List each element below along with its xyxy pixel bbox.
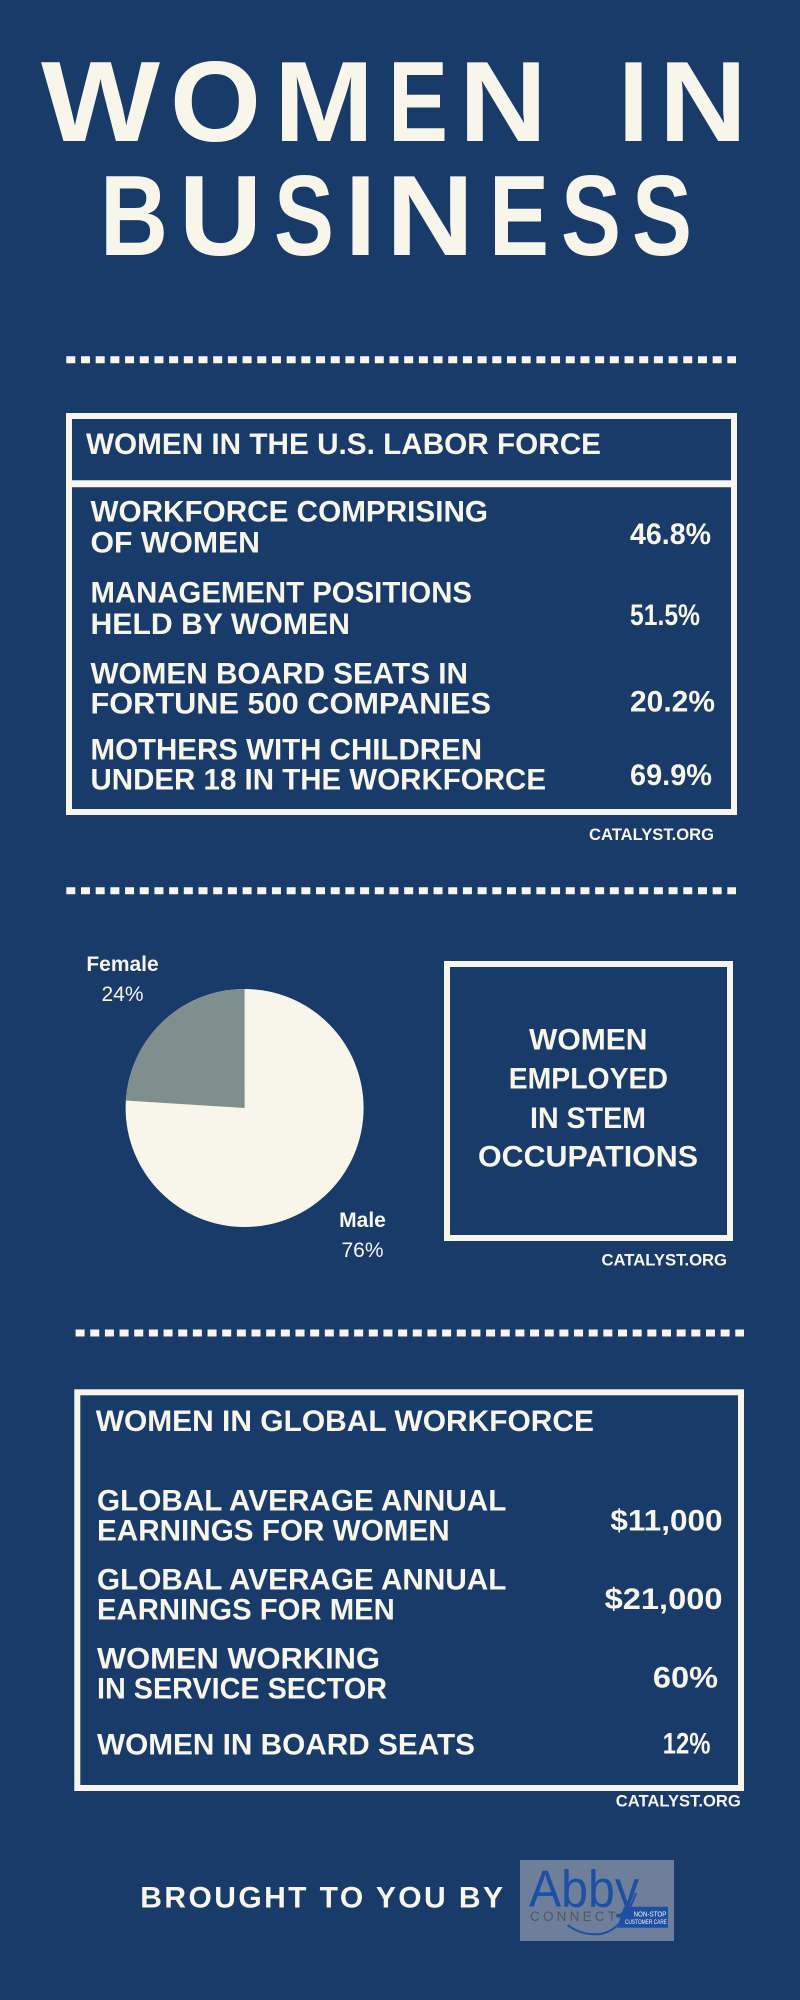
row: management positions bbox=[90, 577, 700, 641]
logo sub-wordmark: CONNECT bbox=[530, 1909, 616, 1924]
title bbox=[41, 39, 747, 280]
title: W bbox=[41, 39, 160, 166]
label: male 76%: 76% bbox=[341, 1239, 384, 1262]
logo tag bbox=[617, 1907, 668, 1928]
row: mothers in the workforce: MOTHERS WITH CHILDREN bbox=[90, 733, 482, 766]
row: workforce comprising of women: WORKFORCE COMPRISING bbox=[90, 496, 488, 529]
footer credit: BROUGHT TO YOU BY bbox=[140, 1882, 503, 1915]
title: N bbox=[386, 153, 474, 280]
logo wordmark: Abby bbox=[529, 1861, 639, 1919]
row: earnings for women bbox=[97, 1484, 722, 1547]
label: male 76% bbox=[339, 1209, 386, 1262]
title: I bbox=[618, 39, 649, 166]
heading: global workforce: WOMEN IN GLOBAL WORKFORCE bbox=[96, 1405, 594, 1438]
row: mothers in the workforce: UNDER 18 IN THE WORKFORCE bbox=[90, 763, 546, 796]
title: M bbox=[274, 39, 374, 166]
panel: women in the U.S. labor force bbox=[69, 416, 734, 812]
slice: male bbox=[126, 989, 364, 1227]
row: board seats: WOMEN IN BOARD SEATS bbox=[97, 1728, 475, 1761]
row: earnings for men: GLOBAL AVERAGE ANNUAL bbox=[97, 1563, 506, 1596]
source: labor force: CATALYST.ORG bbox=[589, 825, 714, 844]
title: E bbox=[489, 153, 549, 280]
logo tag: CUSTOMER CARE bbox=[625, 1919, 667, 1926]
row: service sector: WOMEN WORKING bbox=[97, 1642, 380, 1675]
slice: female bbox=[126, 989, 245, 1108]
panel frame bbox=[447, 964, 730, 1238]
title: E bbox=[388, 39, 448, 166]
row: earnings for men: $21,000 bbox=[605, 1583, 722, 1616]
row: earnings for men bbox=[97, 1563, 722, 1626]
panel text: EMPLOYED bbox=[509, 1063, 668, 1096]
label: female 24%: Female bbox=[86, 953, 159, 976]
row: workforce comprising of women bbox=[90, 496, 711, 560]
row: management positions: MANAGEMENT POSITIONS bbox=[90, 577, 472, 610]
title: S bbox=[274, 153, 334, 280]
panel text: OCCUPATIONS bbox=[478, 1141, 698, 1174]
label: male 76%: Male bbox=[339, 1209, 386, 1232]
heading: labor force: WOMEN IN THE U.S. LABOR FORCE bbox=[86, 428, 601, 461]
panel frame bbox=[69, 416, 734, 812]
label: female 24% bbox=[86, 953, 159, 1006]
title: B bbox=[100, 153, 168, 280]
row: management positions: 51.5% bbox=[630, 599, 700, 632]
title: I bbox=[345, 153, 376, 280]
row: management positions: HELD BY WOMEN bbox=[90, 608, 350, 641]
row: board seats bbox=[90, 657, 715, 720]
panel text: IN STEM bbox=[530, 1102, 646, 1135]
source: global workforce: CATALYST.ORG bbox=[616, 1792, 741, 1811]
title: U bbox=[179, 153, 262, 280]
title: S bbox=[632, 153, 692, 280]
row: workforce comprising of women: OF WOMEN bbox=[90, 527, 260, 560]
panel: women employed in STEM bbox=[447, 964, 730, 1238]
panel text: WOMEN bbox=[529, 1023, 648, 1056]
panel frame bbox=[77, 1392, 741, 1788]
row: board seats: WOMEN BOARD SEATS IN bbox=[90, 657, 468, 690]
logo swoosh bbox=[568, 1893, 636, 1934]
row: board seats: 20.2% bbox=[630, 686, 715, 719]
row: workforce comprising of women: 46.8% bbox=[630, 518, 711, 551]
row: mothers in the workforce: 69.9% bbox=[630, 759, 712, 792]
row: earnings for men: EARNINGS FOR MEN bbox=[97, 1593, 395, 1626]
title: O bbox=[170, 39, 261, 166]
row: earnings for women: GLOBAL AVERAGE ANNUAL bbox=[97, 1484, 506, 1517]
panel text bbox=[478, 1023, 698, 1174]
row: mothers in the workforce bbox=[90, 733, 712, 796]
row: earnings for women: $11,000 bbox=[610, 1505, 722, 1538]
title: N bbox=[459, 39, 547, 166]
row: board seats bbox=[97, 1727, 710, 1761]
row: board seats: FORTUNE 500 COMPANIES bbox=[90, 687, 491, 720]
panel: women in global workforce bbox=[77, 1392, 741, 1788]
pie chart: STEM by gender bbox=[86, 953, 386, 1262]
title: S bbox=[561, 153, 621, 280]
row: service sector: 60% bbox=[653, 1662, 718, 1695]
row: earnings for women: EARNINGS FOR WOMEN bbox=[97, 1514, 450, 1547]
source: STEM: CATALYST.ORG bbox=[602, 1251, 727, 1270]
row: service sector: IN SERVICE SECTOR bbox=[97, 1673, 387, 1706]
row: board seats: 12% bbox=[663, 1727, 710, 1760]
label: female 24%: 24% bbox=[101, 983, 144, 1006]
logo: Abby Connect bbox=[520, 1860, 674, 1941]
logo tag: NON-STOP bbox=[634, 1912, 667, 1919]
title: N bbox=[659, 39, 747, 166]
row: service sector bbox=[97, 1642, 718, 1706]
